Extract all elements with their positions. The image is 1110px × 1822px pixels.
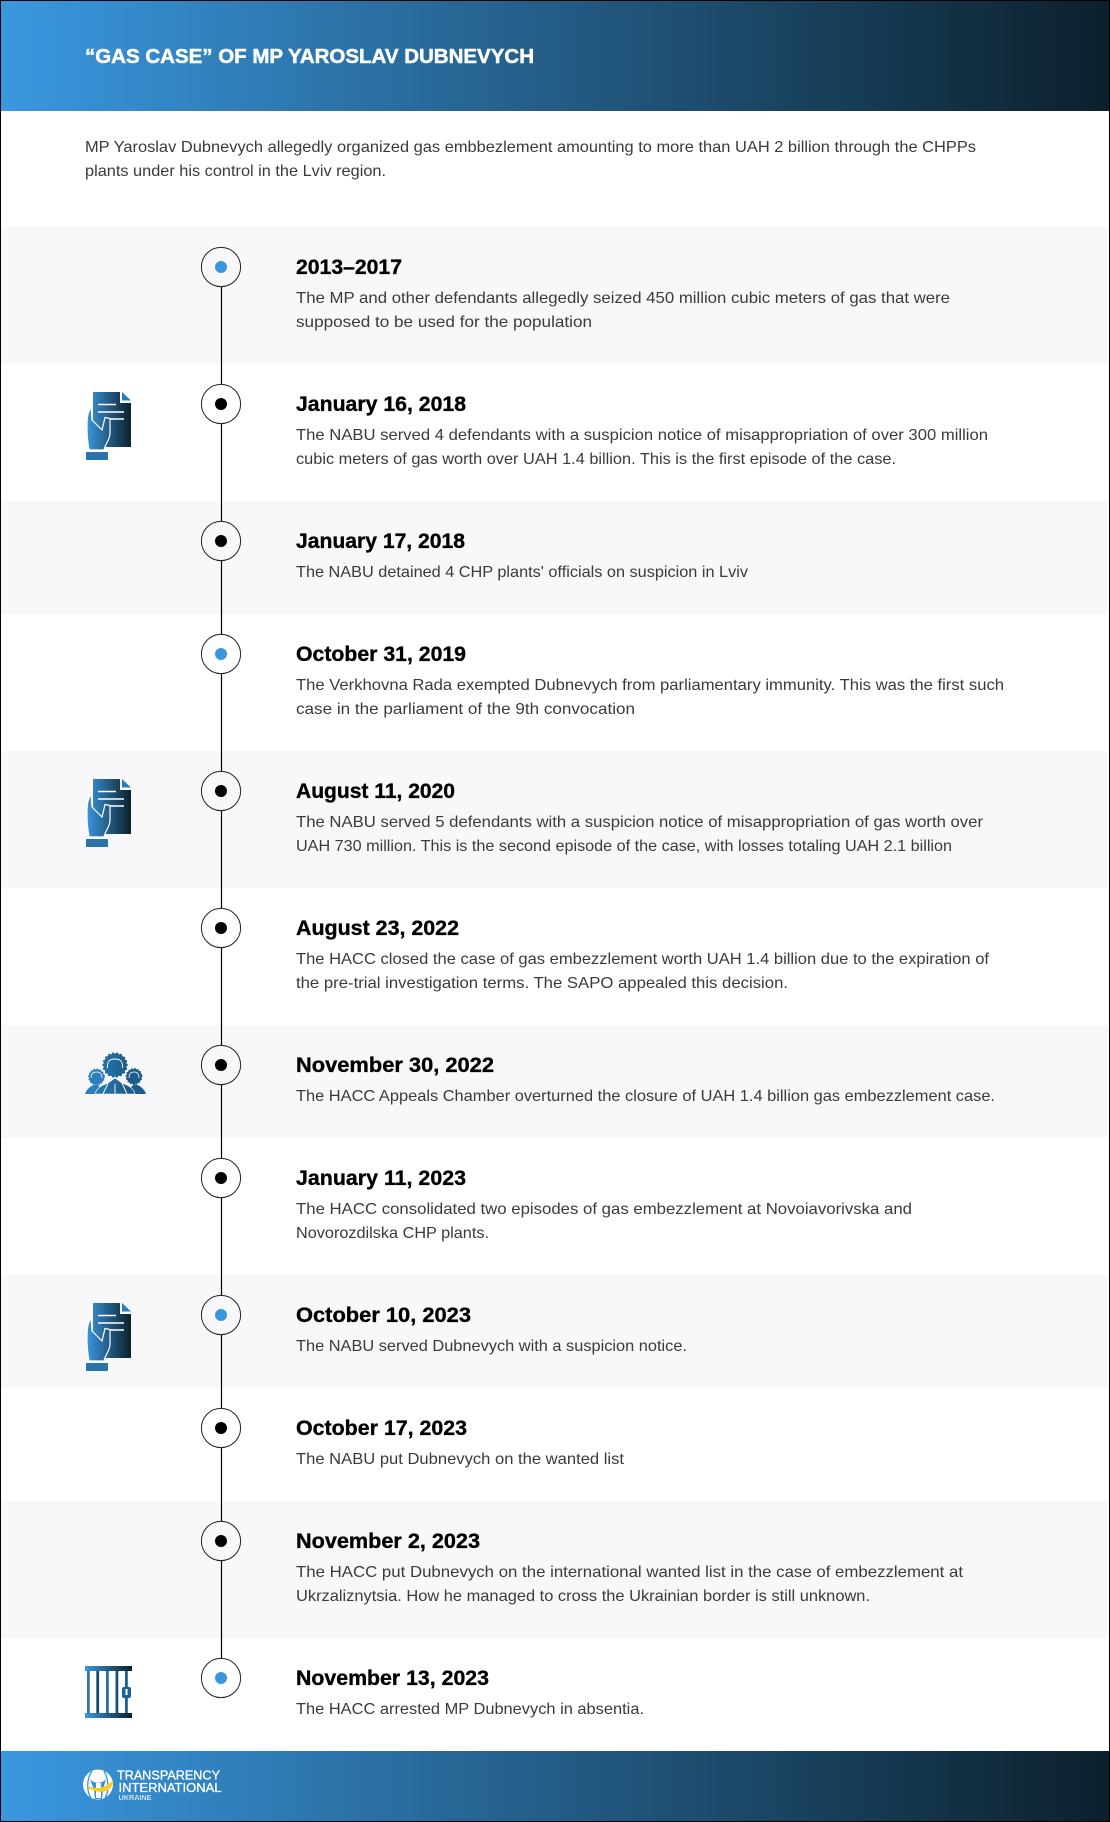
icon: prison bars: [85, 1666, 132, 1718]
entry August 11, 2020: August 11, 2020: [296, 780, 455, 803]
icon: group of judges: [85, 1054, 146, 1094]
entry November 2, 2023: Ukrzaliznytsia. How he managed to cross the Ukrainian border is still unknown.: [296, 1588, 870, 1605]
entry October 31, 2019: [296, 643, 1004, 718]
timeline node October 10, 2023: [201, 1295, 241, 1335]
timeline node August 11, 2020: [201, 771, 241, 811]
entry November 2, 2023: [296, 1530, 964, 1605]
timeline line: [220, 267, 222, 1678]
timeline node October 17, 2023: [201, 1408, 241, 1448]
entry October 10, 2023: October 10, 2023: [296, 1304, 471, 1327]
entry January 16, 2018: The NABU served 4 defendants with a suspicion notice of misappropriation of over 300 million: [296, 427, 988, 444]
entry January 16, 2018: [296, 393, 988, 468]
entry 2013–2017: The MP and other defendants allegedly seized 450 million cubic meters of gas that were: [296, 290, 950, 307]
entry 2013–2017: [296, 256, 950, 331]
timeline node January 17, 2018: [201, 521, 241, 561]
entry August 11, 2020: UAH 730 million. This is the second episode of the case, with losses totaling UAH 2.1 billion: [296, 838, 952, 855]
logo: Transparency International Ukraine: UKRAINE: [118, 1793, 152, 1802]
logo: Transparency International Ukraine: TRANSPARENCY: [117, 1768, 221, 1782]
entry August 23, 2022: The HACC closed the case of gas embezzlement worth UAH 1.4 billion due to the expiration of: [296, 951, 990, 968]
entry August 11, 2020: [296, 780, 984, 855]
entry October 10, 2023: [296, 1304, 687, 1355]
entry October 17, 2023: [296, 1417, 625, 1468]
entry January 17, 2018: [296, 530, 748, 581]
timeline node 2013–2017: [201, 247, 241, 287]
row backgrounds: [0, 227, 1110, 1638]
entry October 31, 2019: October 31, 2019: [296, 643, 466, 666]
icon: hand holding document: [86, 392, 131, 460]
entry October 31, 2019: The Verkhovna Rada exempted Dubnevych from parliamentary immunity. This was the first such: [296, 677, 1004, 694]
entry November 30, 2022: [296, 1054, 995, 1105]
logo: Transparency International Ukraine: [83, 1768, 222, 1802]
entry 2013–2017: 2013–2017: [296, 256, 402, 279]
intro text: [85, 139, 976, 180]
footer banner: [0, 1751, 1110, 1822]
entry January 16, 2018: January 16, 2018: [296, 393, 466, 416]
entry January 17, 2018: The NABU detained 4 CHP plants' officials on suspicion in Lviv: [296, 564, 748, 581]
entry November 30, 2022: The HACC Appeals Chamber overturned the closure of UAH 1.4 billion gas embezzlement case.: [296, 1088, 995, 1105]
entry October 17, 2023: October 17, 2023: [296, 1417, 467, 1440]
icon: hand holding document: [86, 1303, 131, 1371]
entry January 11, 2023: [296, 1167, 912, 1242]
entry August 23, 2022: August 23, 2022: [296, 917, 459, 940]
entry January 11, 2023: Novorozdilska CHP plants.: [296, 1225, 489, 1242]
timeline node January 16, 2018: [201, 384, 241, 424]
title: “GAS CASE” OF MP YAROSLAV DUBNEVYCH: [85, 46, 534, 68]
entry January 11, 2023: The HACC consolidated two episodes of gas embezzlement at Novoiavorivska and: [296, 1201, 912, 1218]
entry August 11, 2020: The NABU served 5 defendants with a suspicion notice of misappropriation of gas worth over: [296, 814, 984, 831]
logo: Transparency International Ukraine: INTERNATIONAL: [118, 1780, 222, 1795]
timeline node November 2, 2023: [201, 1521, 241, 1561]
entry August 23, 2022: the pre-trial investigation terms. The SAPO appealed this decision.: [296, 975, 788, 992]
entry November 13, 2023: The HACC arrested MP Dubnevych in absentia.: [296, 1701, 644, 1718]
entry November 13, 2023: November 13, 2023: [296, 1667, 489, 1690]
entry October 17, 2023: The NABU put Dubnevych on the wanted list: [296, 1451, 625, 1468]
timeline node November 30, 2022: [201, 1045, 241, 1085]
entry January 17, 2018: January 17, 2018: [296, 530, 465, 553]
intro text: MP Yaroslav Dubnevych allegedly organized gas embbezlement amounting to more than UAH 2 billion through the CHPPs: [85, 139, 976, 156]
entry January 16, 2018: cubic meters of gas worth over UAH 1.4 billion. This is the first episode of the case.: [296, 451, 896, 468]
entry August 23, 2022: [296, 917, 990, 992]
entry November 2, 2023: The HACC put Dubnevych on the international wanted list in the case of embezzlement at: [296, 1564, 964, 1581]
icon: hand holding document: [86, 779, 131, 847]
timeline node October 31, 2019: [201, 634, 241, 674]
header banner: [0, 0, 1110, 111]
entry November 13, 2023: [296, 1667, 644, 1718]
timeline node August 23, 2022: [201, 908, 241, 948]
entry October 10, 2023: The NABU served Dubnevych with a suspicion notice.: [296, 1338, 687, 1355]
entry November 2, 2023: November 2, 2023: [296, 1530, 480, 1553]
entry November 30, 2022: November 30, 2022: [296, 1054, 494, 1077]
intro text: plants under his control in the Lviv region.: [85, 163, 386, 180]
entry October 31, 2019: case in the parliament of the 9th convocation: [296, 701, 635, 718]
entry January 11, 2023: January 11, 2023: [296, 1167, 466, 1190]
timeline node January 11, 2023: [201, 1158, 241, 1198]
timeline node November 13, 2023: [201, 1658, 241, 1698]
entry 2013–2017: supposed to be used for the population: [296, 314, 592, 331]
